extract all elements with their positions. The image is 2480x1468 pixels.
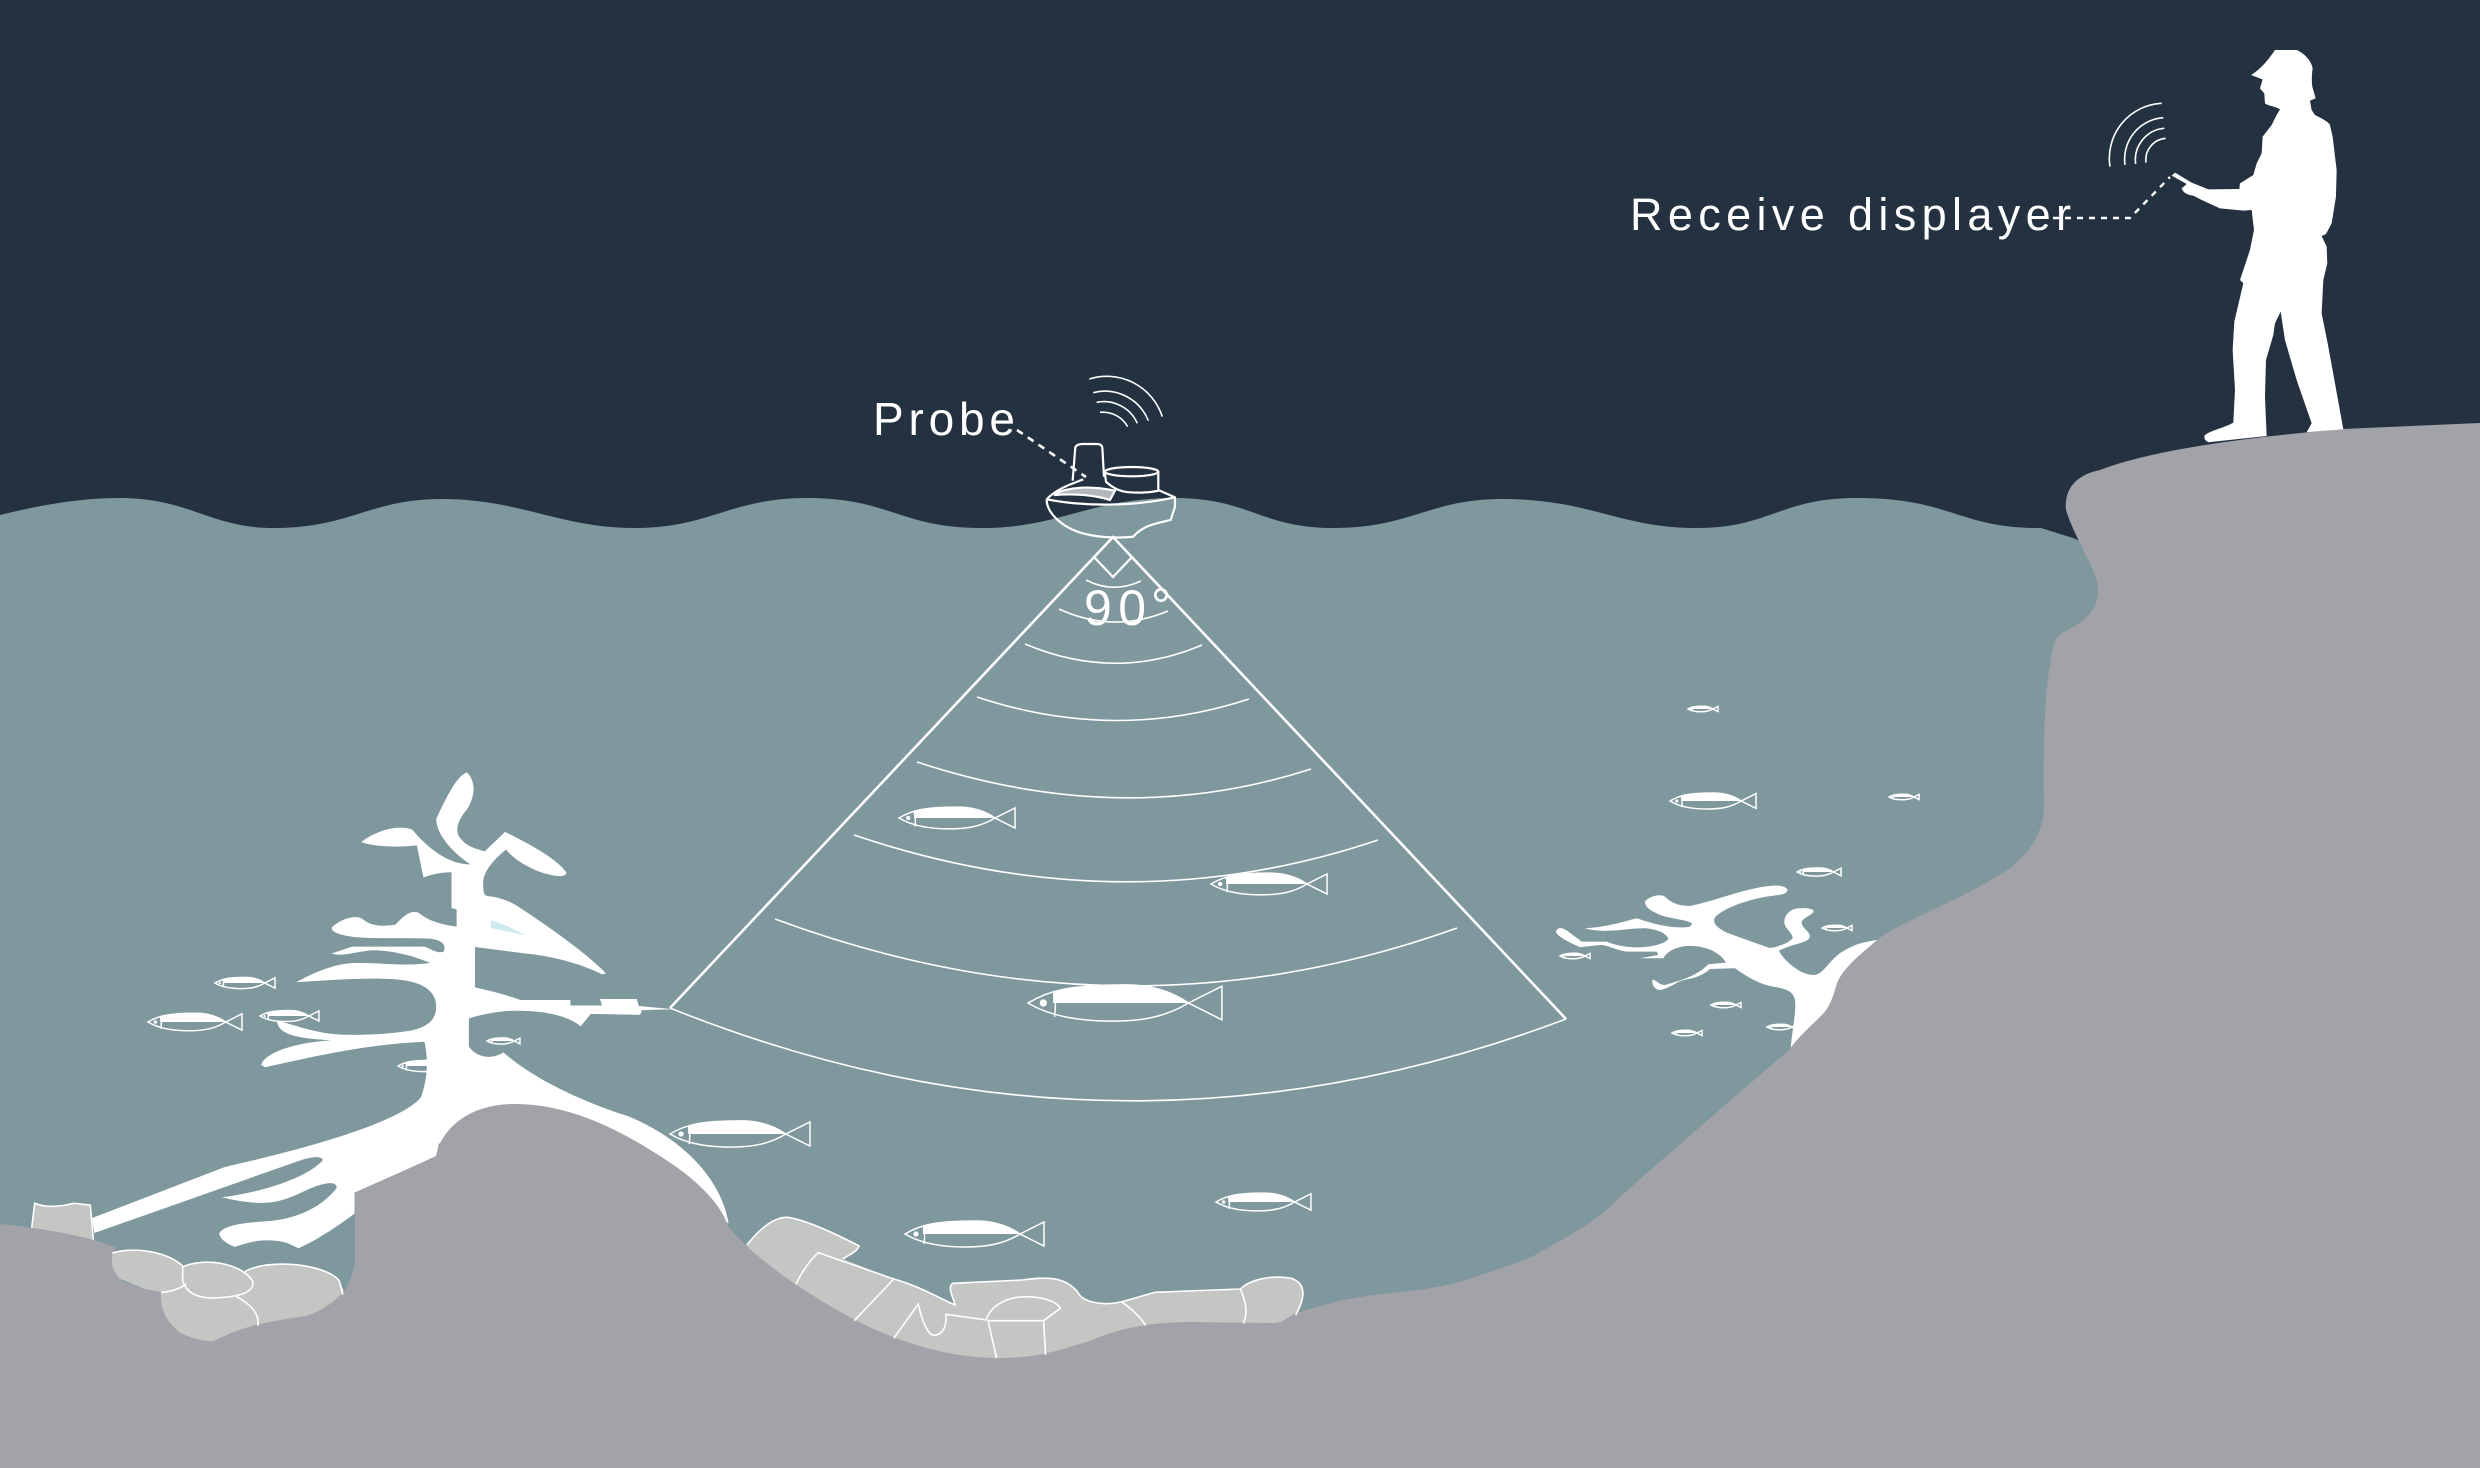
label: 90 degree beam angle: 90	[1084, 580, 1146, 636]
sunken tree: right	[1556, 886, 1880, 1057]
sonar cone: beam edges, angle marker and echo arcs	[670, 537, 1566, 1101]
fish: small right of trunk	[487, 1038, 520, 1044]
leader line: probe	[1017, 430, 1086, 477]
fish: left of tree, large	[148, 1013, 242, 1031]
fish: medium right	[1670, 793, 1756, 809]
fish: above lake bed, right	[1216, 1193, 1311, 1211]
rock outlines: central lake bed	[747, 1217, 1303, 1358]
rock: stump block at root	[31, 1203, 94, 1246]
fish: left of tree, upper	[215, 977, 275, 989]
cone edges	[670, 537, 1566, 1019]
echo arcs	[670, 580, 1566, 1101]
fish: in sonar cone, right	[1211, 873, 1327, 895]
fish: behind right branch	[1767, 1024, 1797, 1030]
panel: water body with wavy surface	[0, 498, 2150, 1468]
icon: signal arcs above boat	[1089, 376, 1162, 427]
fish: right of branch	[1822, 925, 1852, 931]
fish: left of tree, middle	[260, 1010, 319, 1022]
fisherman silhouette	[2172, 50, 2343, 442]
fish: left of branch	[1560, 953, 1590, 959]
label: Probe: Probe	[873, 393, 1015, 445]
fish: lower below branch	[1672, 1030, 1702, 1036]
icon: signal arcs by handheld display	[2109, 103, 2166, 167]
fish group: fish swimming in the lake	[148, 706, 1919, 1247]
label: Receive displayer: Receive displayer	[1630, 189, 2071, 240]
fish: below branch	[1711, 1002, 1741, 1008]
ground: grey lake bed and right bank	[0, 423, 2480, 1468]
fish: behind trunk	[398, 1060, 458, 1072]
fish: small upper right	[1688, 706, 1718, 712]
fish: large in sonar cone	[1028, 985, 1222, 1021]
rock outlines: left lake bed	[112, 1250, 343, 1326]
label: 90 degree beam angle	[1084, 578, 1171, 636]
icon: probe boat	[1047, 444, 1175, 537]
right angle marker	[1094, 557, 1132, 577]
rocks: central lake bed fill	[700, 1217, 1303, 1413]
sunken tree: left	[92, 772, 729, 1248]
light blue sliver on tree	[491, 920, 526, 935]
fish: above right branch	[1797, 868, 1841, 876]
fish: above lake bed rocks	[905, 1221, 1044, 1247]
fish: below cone, near left hill	[670, 1121, 810, 1147]
leader line: receive displayer	[2053, 177, 2170, 218]
fish: in sonar cone, upper left	[899, 807, 1015, 829]
fish: small far right	[1889, 794, 1919, 800]
rocks: left lake bed fill	[31, 1203, 347, 1353]
label: 90 degree beam angle: °	[1151, 578, 1171, 634]
